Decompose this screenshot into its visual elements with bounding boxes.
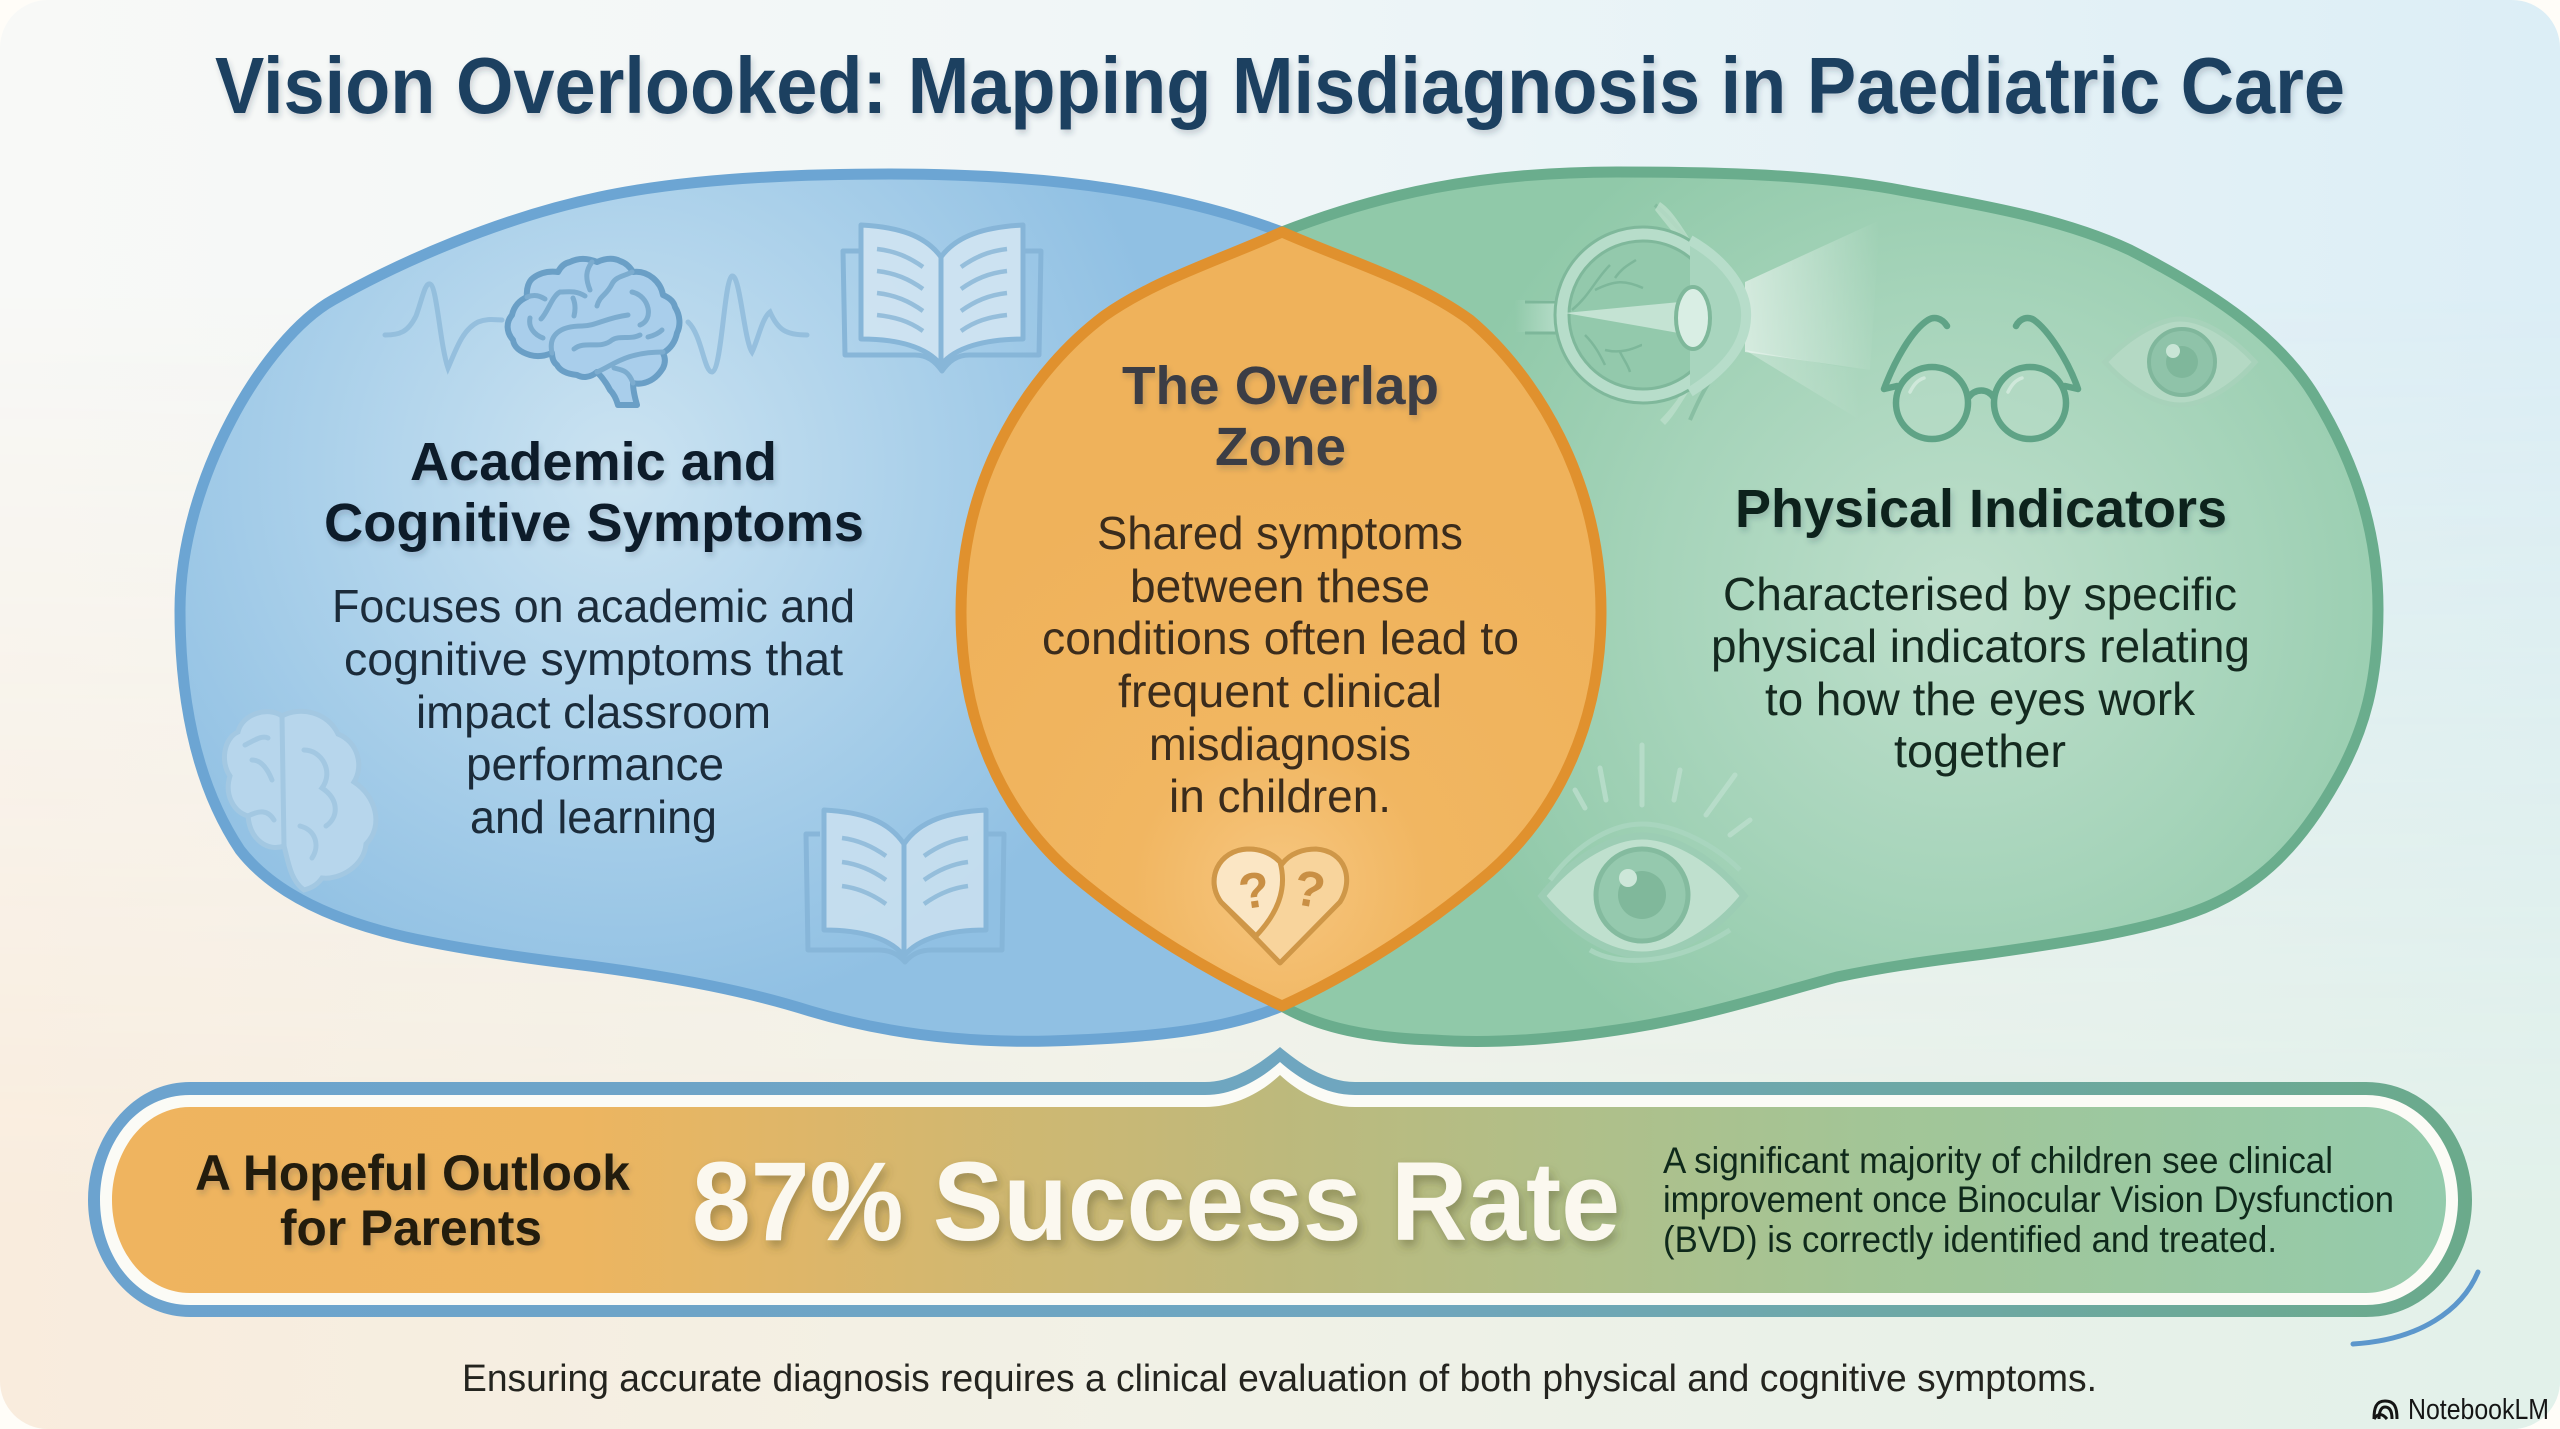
body text: academic — [332, 580, 855, 843]
body text: physical: to how the eyes work — [1765, 673, 2196, 725]
big statistic: 87% Success Rate — [692, 1139, 1620, 1264]
heading: the overlap zone: Zone — [1215, 417, 1346, 477]
icon: broken heart with question marks — [1214, 849, 1347, 963]
callout: hopeful outlook banner — [88, 1047, 2472, 1317]
body text: overlap: between these — [1130, 560, 1430, 612]
heading: physical indicators: Physical Indicators — [1735, 479, 2227, 539]
blue lobe shape — [180, 174, 1282, 1041]
body text: overlap: frequent clinical — [1118, 665, 1442, 717]
body text: overlap: Shared symptoms — [1097, 507, 1463, 559]
heading: academic and cognitive symptoms: Academic and — [410, 432, 777, 492]
icon: pulse right — [688, 276, 807, 372]
title: Vision Overlooked: Mapping Misdiagnosis in Paediatric Care — [215, 41, 2345, 130]
body text: physical: physical indicators relating — [1711, 620, 2250, 672]
icon: glasses — [1884, 318, 2078, 439]
orange overlap shape — [961, 232, 1601, 1006]
body text: physical: together — [1894, 725, 2066, 777]
icon: broken heart with question marks: ? — [1290, 859, 1329, 920]
banner outer ring — [88, 1047, 2472, 1317]
heading: the overlap zone: The Overlap — [1122, 356, 1439, 416]
banner white ring — [100, 1062, 2458, 1305]
body text: overlap — [1042, 507, 1519, 822]
icon: open book top — [843, 225, 1041, 371]
icon: open book bottom — [806, 810, 1004, 962]
banner heading — [195, 1145, 630, 1256]
banner description: (BVD) is correctly identified and treated. — [1663, 1219, 2277, 1260]
footer note: Ensuring accurate diagnosis requires a clinical evaluation of both physical and cognitive symptoms. — [462, 1358, 2097, 1400]
banner description: A significant majority of children see clinical — [1663, 1140, 2333, 1181]
icon: notebooklm logo — [2374, 1401, 2397, 1419]
body text: overlap: misdiagnosis — [1149, 718, 1411, 770]
green lobe shape — [1282, 172, 2378, 1042]
icon: pulse left — [385, 284, 502, 368]
decorative blue swoosh — [2353, 1272, 2478, 1344]
banner description — [1663, 1140, 2394, 1260]
heading: the overlap zone — [1122, 356, 1439, 477]
body text: physical — [1711, 568, 2250, 777]
panel: the overlap zone — [961, 232, 1601, 1006]
icon: brain — [508, 259, 679, 405]
body text: academic: impact classroom — [416, 686, 771, 738]
icon: broken heart with question marks: ? — [1235, 861, 1273, 920]
body text: academic: Focuses on academic and — [332, 580, 855, 632]
banner heading: for Parents — [280, 1200, 542, 1256]
icon: ghost brain — [224, 711, 376, 890]
panel: academic and cognitive symptoms — [180, 174, 1282, 1041]
body text: overlap: conditions often lead to — [1042, 612, 1519, 664]
banner heading: A Hopeful Outlook — [195, 1145, 630, 1201]
body text: academic: cognitive symptoms that — [344, 633, 843, 685]
body text: overlap: in children. — [1169, 770, 1391, 822]
icon: eye anatomy with light beam — [1515, 202, 1880, 425]
banner fill — [112, 1075, 2446, 1293]
body text: physical: Characterised by specific — [1723, 568, 2237, 620]
banner description: improvement once Binocular Vision Dysfunction — [1663, 1179, 2394, 1220]
body text: academic: performance — [466, 738, 724, 790]
heading: academic and cognitive symptoms — [324, 432, 864, 553]
icon: eye right — [2105, 319, 2255, 405]
heading: academic and cognitive symptoms: Cognitive Symptoms — [324, 493, 864, 553]
icon: eye bottom with rays — [1542, 745, 1750, 960]
panel: physical indicators — [1282, 172, 2378, 1042]
body text: academic: and learning — [470, 791, 717, 843]
